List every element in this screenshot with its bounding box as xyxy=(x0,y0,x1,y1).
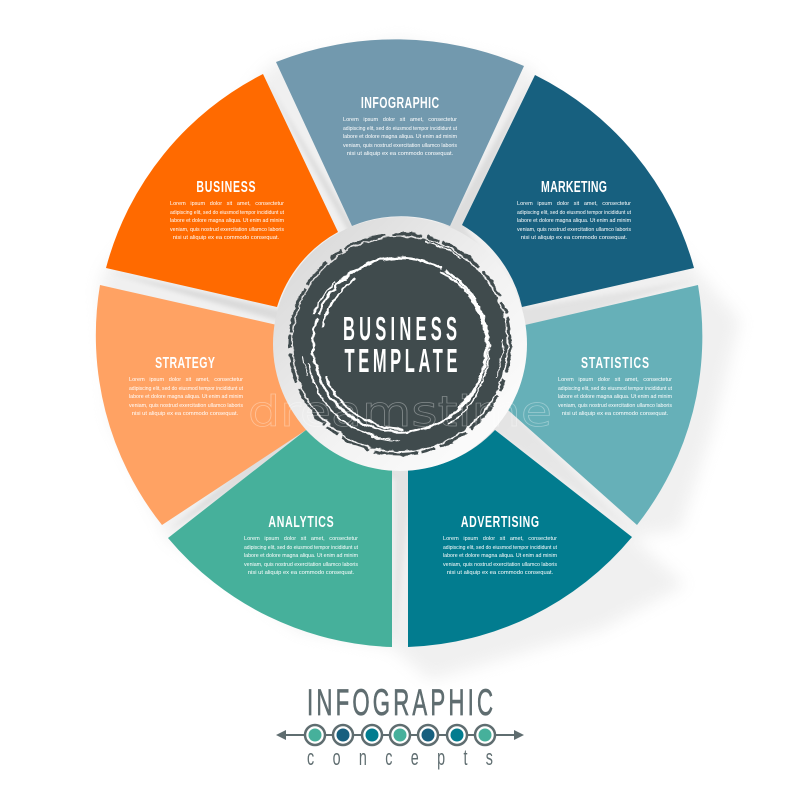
text block: business: nisi ut aliquip ex ea commodo consequat. xyxy=(173,235,280,241)
text block: marketing: veniam, quis nostrud exercitation ullamco laboris xyxy=(517,227,631,233)
timeline xyxy=(276,725,524,745)
text block: advertising: nisi ut aliquip ex ea commodo consequat. xyxy=(447,570,554,576)
center title: BUSINESS xyxy=(343,310,457,348)
text block: analytics: labore et dolore magna aliqua. Ut enim ad minim xyxy=(244,553,358,559)
heading: business: BUSINESS xyxy=(196,178,256,196)
text block: advertising: adipiscing elit, sed do eiusmod tempor incididunt ut xyxy=(443,545,557,551)
segment: infographic xyxy=(276,39,524,226)
text block: analytics xyxy=(244,536,358,576)
text block: statistics: labore et dolore magna aliqua. Ut enim ad minim xyxy=(558,394,672,400)
text block: business: veniam, quis nostrud exercitation ullamco laboris xyxy=(170,227,284,233)
center hub xyxy=(273,217,527,471)
text block: analytics: Lorem ipsum dolor sit amet, consectetur xyxy=(244,536,358,542)
text block: analytics: veniam, quis nostrud exercitation ullamco laboris xyxy=(244,562,358,568)
text block: business: labore et dolore magna aliqua. Ut enim ad minim xyxy=(170,218,284,224)
text block: analytics: adipiscing elit, sed do eiusmod tempor incididunt ut xyxy=(244,545,358,551)
text block: business xyxy=(170,201,284,241)
text block: statistics: nisi ut aliquip ex ea commodo consequat. xyxy=(562,411,669,417)
node 6 xyxy=(447,725,467,745)
text block: infographic xyxy=(343,117,457,157)
node 2 xyxy=(333,725,353,745)
text block: strategy: nisi ut aliquip ex ea commodo consequat. xyxy=(132,411,239,417)
text block: advertising xyxy=(443,536,557,576)
heading: statistics: STATISTICS xyxy=(581,354,649,372)
node 7 xyxy=(475,725,495,745)
heading: infographic: INFOGRAPHIC xyxy=(361,94,439,112)
center title xyxy=(343,310,458,380)
text block: infographic: nisi ut aliquip ex ea commodo consequat. xyxy=(347,151,454,157)
text block: infographic: Lorem ipsum dolor sit amet, consectetur xyxy=(343,117,457,123)
segment: strategy xyxy=(96,285,306,525)
node 4 xyxy=(390,725,410,745)
text block: strategy: veniam, quis nostrud exercitation ullamco laboris xyxy=(129,403,243,409)
text block: strategy xyxy=(129,377,243,417)
segment: marketing xyxy=(462,75,694,307)
segment shadows xyxy=(100,40,740,680)
brush circle xyxy=(290,234,510,454)
text block: infographic: adipiscing elit, sed do eiusmod tempor incididunt ut xyxy=(343,126,457,132)
heading: marketing: MARKETING xyxy=(541,178,607,196)
text block: business: adipiscing elit, sed do eiusmod tempor incididunt ut xyxy=(170,210,284,216)
footer subtitle: concepts xyxy=(307,745,493,770)
watermark: dreamstime xyxy=(248,387,552,436)
text block: marketing: nisi ut aliquip ex ea commodo consequat. xyxy=(521,235,628,241)
text block: advertising: veniam, quis nostrud exercitation ullamco laboris xyxy=(443,562,557,568)
text block: infographic: veniam, quis nostrud exercitation ullamco laboris xyxy=(343,143,457,149)
node 5 xyxy=(418,725,438,745)
heading: strategy: STRATEGY xyxy=(155,354,215,372)
segment: business xyxy=(106,74,338,307)
text block: statistics xyxy=(558,377,672,417)
text block: marketing xyxy=(517,201,631,241)
text block: strategy: adipiscing elit, sed do eiusmod tempor incididunt ut xyxy=(129,386,243,392)
text block: statistics: Lorem ipsum dolor sit amet, consectetur xyxy=(558,377,672,383)
footer title: INFOGRAPHIC xyxy=(307,682,493,723)
node 1 xyxy=(305,725,325,745)
heading: advertising: ADVERTISING xyxy=(461,513,539,531)
text block: statistics: adipiscing elit, sed do eiusmod tempor incididunt ut xyxy=(558,386,672,392)
text block: analytics: nisi ut aliquip ex ea commodo consequat. xyxy=(248,570,355,576)
text block: strategy: labore et dolore magna aliqua. Ut enim ad minim xyxy=(129,394,243,400)
segment: statistics xyxy=(508,285,702,525)
text block: business: Lorem ipsum dolor sit amet, consectetur xyxy=(170,201,284,207)
heading: analytics: ANALYTICS xyxy=(268,513,334,531)
segment: analytics xyxy=(168,430,392,647)
center title: TEMPLATE xyxy=(344,342,458,380)
text block: marketing: Lorem ipsum dolor sit amet, consectetur xyxy=(517,201,631,207)
text block: marketing: labore et dolore magna aliqua. Ut enim ad minim xyxy=(517,218,631,224)
text block: infographic: labore et dolore magna aliqua. Ut enim ad minim xyxy=(343,134,457,140)
text block: marketing: adipiscing elit, sed do eiusmod tempor incididunt ut xyxy=(517,210,631,216)
text block: advertising: labore et dolore magna aliqua. Ut enim ad minim xyxy=(443,553,557,559)
node 3 xyxy=(362,725,382,745)
text block: advertising: Lorem ipsum dolor sit amet, consectetur xyxy=(443,536,557,542)
text block: statistics: veniam, quis nostrud exercitation ullamco laboris xyxy=(558,403,672,409)
segment: advertising xyxy=(408,430,632,647)
text block: strategy: Lorem ipsum dolor sit amet, consectetur xyxy=(129,377,243,383)
